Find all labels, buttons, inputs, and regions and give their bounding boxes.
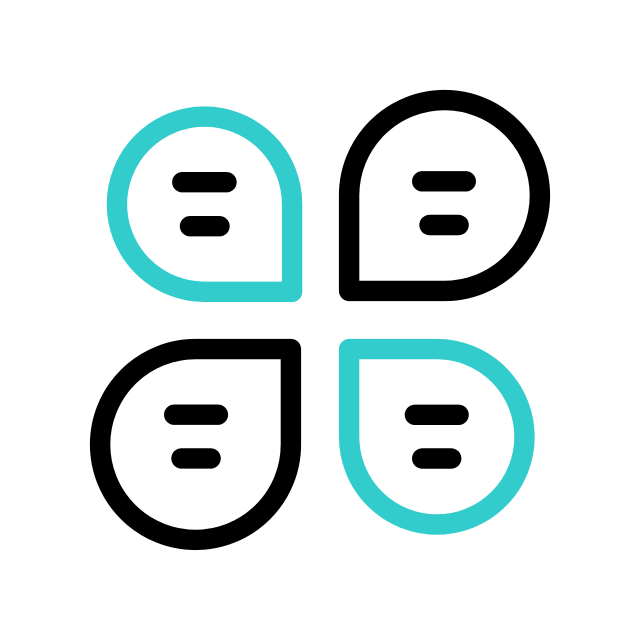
speech bubble: top left teal [117, 117, 292, 292]
bubble outline: top left [117, 117, 292, 292]
bubble outline: bottom left [100, 349, 291, 540]
speech bubble: bottom right teal [349, 349, 524, 524]
bubble outline: top right [349, 100, 540, 291]
text lines: bottom right [415, 415, 459, 458]
text lines: top right [422, 181, 466, 225]
bubble outline: bottom right [349, 349, 524, 524]
text lines: top left [182, 182, 226, 226]
text lines: bottom left [174, 415, 218, 458]
speech bubble: bottom left black [100, 349, 291, 540]
speech bubble: top right black [349, 100, 540, 291]
